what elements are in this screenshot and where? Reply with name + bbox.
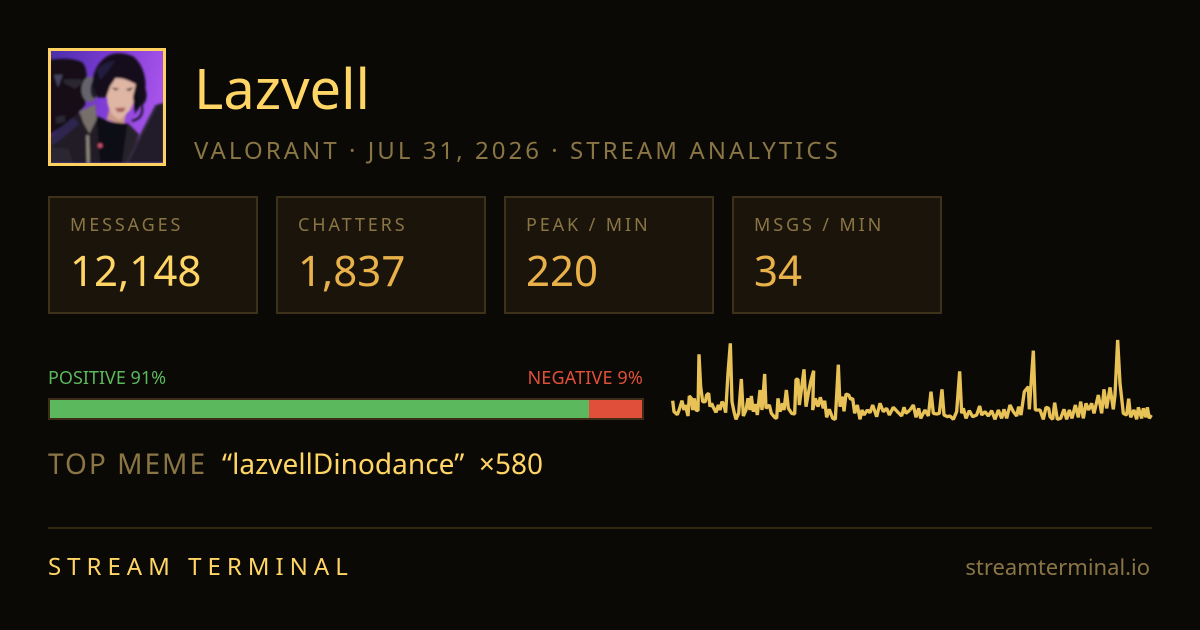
hood <box>79 104 97 134</box>
avatar <box>48 48 166 166</box>
neck <box>107 109 128 125</box>
sentiment bar <box>48 398 644 420</box>
jacket <box>49 105 100 163</box>
stat card: messages per minute <box>732 196 942 314</box>
stat card: chatters <box>276 196 486 314</box>
stat card: chatters: 1,837 <box>298 242 405 299</box>
right ear cup <box>135 85 147 105</box>
hair <box>92 53 146 111</box>
positive label: POSITIVE 91% <box>48 366 166 390</box>
title: Lazvell <box>194 50 370 126</box>
stat card: messages: MESSAGES <box>70 213 183 237</box>
monitor <box>125 103 164 163</box>
footer brand: STREAM TERMINAL <box>48 550 354 583</box>
left ear cup <box>81 77 98 102</box>
eyes and mouth <box>112 87 120 90</box>
top meme value: “lazvellDinodance” ×580 <box>222 445 543 483</box>
face <box>105 77 136 120</box>
top meme label: TOP MEME <box>48 445 207 483</box>
stat card: chatters: CHATTERS <box>298 213 407 237</box>
shirt <box>95 115 139 163</box>
divider <box>48 527 1152 529</box>
stat card: messages per minute: 34 <box>754 242 802 299</box>
stat card: messages: 12,148 <box>70 242 201 299</box>
stat card: peak per minute <box>504 196 714 314</box>
chair <box>49 59 87 135</box>
stat card: peak per minute: 220 <box>526 242 598 299</box>
subtitle: VALORANT · JUL 31, 2026 · STREAM ANALYTICS <box>194 134 841 167</box>
stat card: messages <box>48 196 258 314</box>
stat card: messages per minute: MSGS / MIN <box>754 213 884 237</box>
footer url: streamterminal.io <box>965 552 1150 582</box>
negative label: NEGATIVE 9% <box>527 366 643 390</box>
desk gear <box>49 147 73 163</box>
stat card: peak per minute: PEAK / MIN <box>526 213 651 237</box>
